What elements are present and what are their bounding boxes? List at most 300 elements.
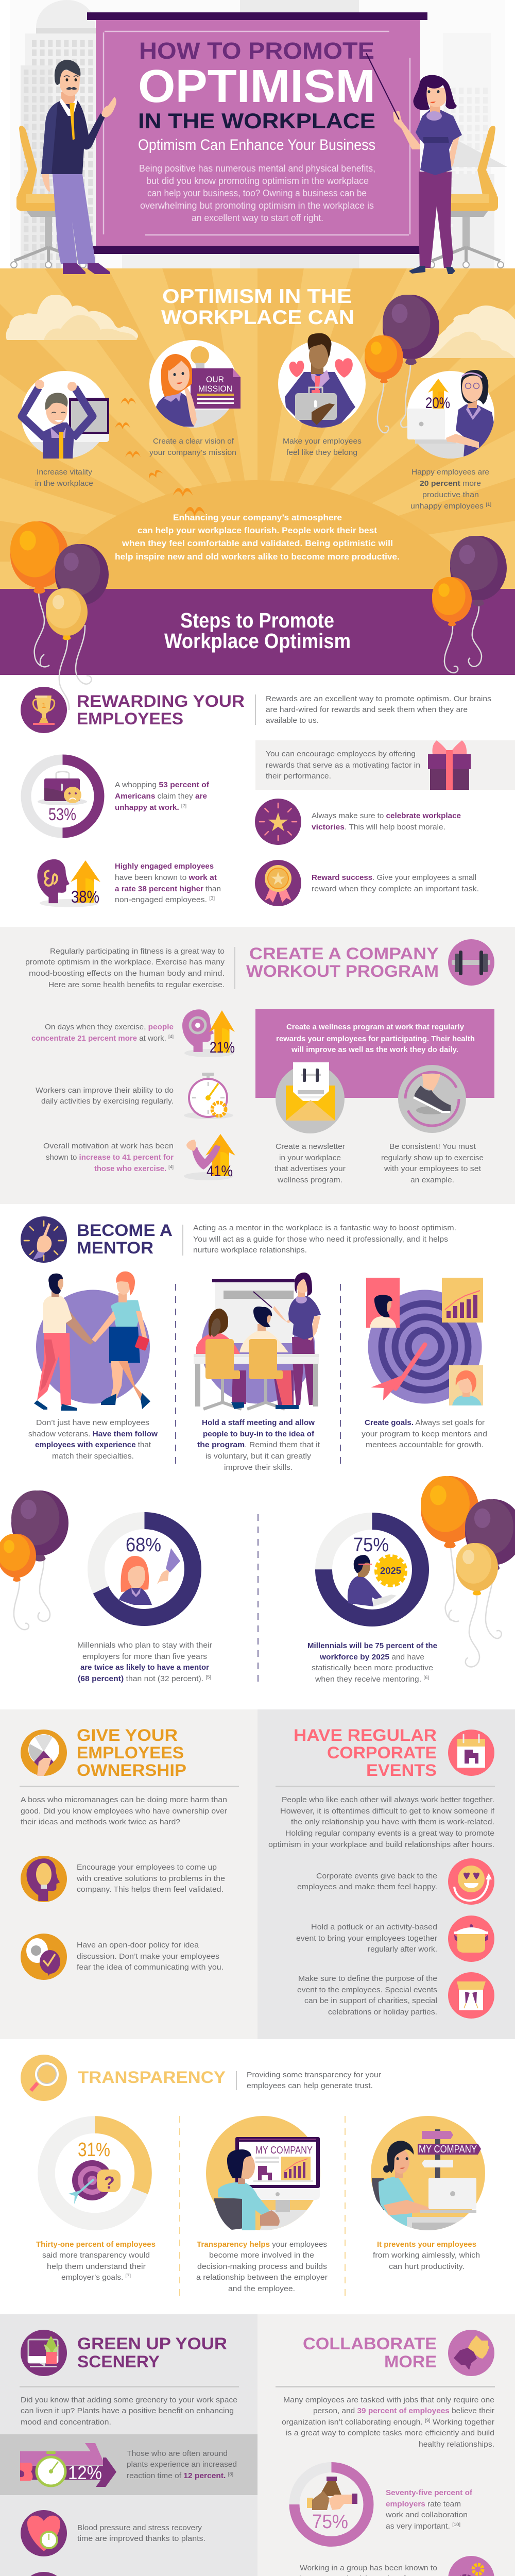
icon: running shoe bbox=[398, 1065, 466, 1133]
captions under circle illustrations: productive than bbox=[422, 490, 479, 499]
captions: in your workplace bbox=[279, 1154, 341, 1162]
stat text: 38 percent: non-engaged employees. bbox=[115, 895, 202, 904]
intro text: nurture workplace relationships. bbox=[193, 1246, 307, 1255]
captions under circle illustrations bbox=[35, 437, 491, 511]
stat text: 38 percent: Highly engaged employees bbox=[115, 862, 214, 871]
illustration: productive employee bbox=[407, 370, 495, 459]
intro text bbox=[21, 2396, 237, 2427]
stat text: 38 percent: have been known to work at bbox=[115, 873, 217, 882]
balloons top right bbox=[365, 295, 439, 433]
heading: REWARDING YOUR bbox=[77, 692, 245, 710]
icon: gears and arrow bbox=[448, 2556, 494, 2576]
balloons right of steps band bbox=[432, 536, 507, 673]
band: reaction time stat: [8] bbox=[228, 2471, 233, 2477]
illustration: shadowing bbox=[34, 1272, 150, 1411]
title: OPTIMISM bbox=[138, 61, 375, 112]
tip text: define the purpose: event to the employees. Special events bbox=[297, 1986, 437, 1994]
intro text: Here are some health benefits to regular exercise. bbox=[48, 980, 225, 989]
presentation screen bbox=[87, 12, 427, 254]
heading bbox=[77, 1221, 173, 1257]
captions: employees with experience that bbox=[35, 1440, 151, 1449]
our mission sign text: MISSION bbox=[198, 384, 232, 394]
heading: SCENERY bbox=[77, 2352, 160, 2371]
heading: GREEN UP YOUR bbox=[77, 2334, 227, 2353]
cloud left bbox=[6, 295, 138, 340]
illustration: company dashboard bbox=[206, 2116, 320, 2236]
icon: star bbox=[255, 799, 301, 845]
hero background: city skyline bbox=[0, 0, 515, 268]
stat text: 68 percent: are twice as likely to have a mentor bbox=[80, 1663, 209, 1672]
intro text: Many employees are tasked with jobs that only require one bbox=[283, 2396, 494, 2404]
purple band background bbox=[0, 589, 515, 675]
title: IN THE WORKPLACE bbox=[138, 109, 375, 133]
icon: medal bbox=[255, 860, 301, 906]
tip text: creative solutions: Encourage your employees to come up bbox=[77, 1863, 217, 1872]
tip text: productivity: Working in a group has been known to bbox=[300, 2564, 437, 2572]
tip text: potluck bbox=[296, 1923, 437, 1954]
heading: OWNERSHIP bbox=[77, 1761, 186, 1780]
intro paragraph: can help your business, too? Owning a business can be bbox=[147, 188, 367, 198]
heading bbox=[246, 944, 439, 980]
donut: 68 percent bbox=[96, 1521, 193, 1618]
intro paragraph: overwhelming but promoting optimism in the workplace is bbox=[140, 200, 374, 211]
icon: cooking pot bbox=[448, 1916, 494, 1962]
captions under circle illustrations: Make your employees bbox=[283, 437, 362, 446]
our mission sign text: OUR bbox=[206, 375, 224, 384]
captions: Create goals. Always set goals for bbox=[365, 1418, 485, 1427]
tip text: open-door policy: Have an open-door policy for idea bbox=[77, 1941, 199, 1950]
tip: celebrate victories bbox=[312, 811, 461, 832]
captions: that advertises your bbox=[274, 1164, 346, 1173]
captions: It prevents your employees bbox=[377, 2240, 476, 2249]
icon: calendar bbox=[448, 1730, 494, 1776]
heading: EMPLOYEES bbox=[77, 709, 183, 728]
captions: help them understand their bbox=[47, 2262, 146, 2271]
stat text: 21 percent bbox=[31, 1023, 174, 1043]
captions under circle illustrations: your company’s mission bbox=[149, 448, 236, 457]
intro text: their ideas and methods work twice as hard? bbox=[21, 1818, 180, 1826]
heading: EMPLOYEES bbox=[77, 1743, 184, 1762]
captions: decision-making process and builds bbox=[197, 2262, 327, 2271]
panel: rewarding your employees bbox=[21, 687, 515, 907]
captions: from working aimlessly, which bbox=[373, 2251, 480, 2260]
table and chairs bbox=[194, 1339, 319, 1409]
stat text: 21 percent: [4] bbox=[168, 1034, 174, 1039]
stat icon: 21 percent concentration bbox=[182, 1009, 235, 1057]
wellness program callout: Create a wellness program at work that regularly bbox=[286, 1023, 465, 1031]
steps heading bbox=[164, 608, 351, 653]
intro text: Acting as a mentor in the workplace is a fantastic way to boost optimism. bbox=[193, 1224, 456, 1232]
panel: become a mentor bbox=[0, 1216, 515, 1684]
stat text: team work: Seventy-five percent of bbox=[386, 2488, 473, 2497]
heading: TRANSPARENCY bbox=[78, 2068, 226, 2087]
tip text: blood pressure: Blood pressure and stress recovery bbox=[77, 2523, 202, 2532]
illustration: target with goals bbox=[366, 1278, 483, 1405]
heading: GIVE YOUR bbox=[77, 1726, 178, 1744]
20 percent figure: 20% bbox=[425, 395, 450, 412]
closing statement of yellow section: Enhancing your company’s atmosphere bbox=[173, 513, 342, 522]
tip: reward success bbox=[312, 873, 479, 893]
photo: mentor bbox=[366, 1278, 400, 1328]
captions: and the employee. bbox=[228, 2284, 295, 2293]
icon: champagne card bbox=[448, 1972, 494, 2019]
captions under circle illustrations: Create a clear vision of bbox=[153, 437, 234, 446]
stat text: team work: work and collaboration bbox=[385, 2511, 468, 2519]
icon: idea head bbox=[21, 1856, 67, 1902]
balloons right bbox=[421, 1476, 515, 1667]
icon: 38 percent head and arrow bbox=[37, 859, 100, 907]
stat text: team work: as very important. bbox=[386, 2522, 447, 2531]
intro text: can liven it up? Plants have a positive benefit on enhancing bbox=[21, 2406, 234, 2415]
icon: newsletter envelope bbox=[276, 1062, 345, 1133]
section heading: optimism in the workplace can: WORKPLACE CAN bbox=[161, 307, 354, 329]
donut: 68 percent: 68% bbox=[126, 1534, 161, 1556]
captions: an example. bbox=[410, 1176, 454, 1184]
intro text: Regularly participating in fitness is a great way to bbox=[50, 947, 225, 956]
stat text: team work: [10] bbox=[452, 2522, 460, 2527]
heading: EVENTS bbox=[366, 1761, 437, 1780]
intro text: Holding regular company events is a great way to promote bbox=[285, 1829, 494, 1838]
stat icon: 21 percent concentration: 21% bbox=[210, 1039, 235, 1056]
stat text: 53 percent bbox=[115, 781, 210, 812]
stat text: daily activities: daily activities by exercising regularly. bbox=[41, 1097, 174, 1106]
intro text bbox=[268, 1795, 495, 1849]
captions under circle illustrations: 20 percent more bbox=[420, 479, 481, 488]
icon: stopwatch with gear bbox=[184, 1073, 233, 1119]
presenter: man bbox=[41, 60, 116, 274]
yellow section background with sun rays bbox=[0, 268, 515, 589]
captions bbox=[28, 1418, 487, 1472]
captions: said more transparency would bbox=[42, 2251, 150, 2260]
man bbox=[34, 1274, 94, 1411]
stat text: 41 percent: [4] bbox=[168, 1164, 174, 1170]
icon: trophy bbox=[21, 687, 67, 733]
captions: regularly show up to exercise bbox=[381, 1154, 484, 1162]
closing statement of yellow section: help inspire new and old workers alike to become more productive. bbox=[115, 552, 400, 562]
donut: 75 percent: 2025 bbox=[380, 1566, 401, 1576]
closing statement of yellow section: when they feel comfortable and validated. Being optimistic will bbox=[122, 538, 393, 548]
gift callout: rewards that serve as a motivating factor in bbox=[266, 761, 420, 770]
intro text bbox=[193, 1224, 456, 1255]
teacher bbox=[273, 1273, 321, 1405]
captions: [7] bbox=[126, 2273, 131, 2278]
intro paragraph: Being positive has numerous mental and physical benefits, bbox=[139, 163, 375, 174]
gift callout: their performance. bbox=[266, 772, 331, 781]
woman bbox=[92, 1272, 150, 1409]
seated woman bbox=[196, 1309, 240, 1354]
chart card bbox=[442, 1278, 483, 1323]
stat text: daily activities: Workers can improve their ability to do bbox=[36, 1086, 174, 1095]
tip text: give back: Corporate events give back to the bbox=[316, 1872, 437, 1880]
stat text: daily activities bbox=[36, 1086, 174, 1106]
gift callout bbox=[255, 740, 515, 790]
icon: puzzle bbox=[448, 2330, 494, 2376]
stat text: 75 percent: [6] bbox=[423, 1675, 429, 1680]
band: reaction time stat: 12% bbox=[68, 2462, 102, 2483]
donut: 75 percent team work: 75% bbox=[312, 2511, 348, 2533]
captions: wellness program. bbox=[277, 1176, 342, 1184]
heading: WORKOUT PROGRAM bbox=[246, 962, 439, 980]
screen label: MY COMPANY bbox=[255, 2145, 313, 2156]
closing statement of yellow section bbox=[115, 513, 400, 562]
our mission sign text bbox=[198, 375, 232, 394]
section heading: optimism in the workplace can: OPTIMISM IN THE bbox=[162, 285, 352, 308]
tip text: open-door policy: discussion. Don’t make your employees bbox=[77, 1952, 219, 1961]
donut: 53 percent bbox=[26, 759, 99, 833]
intro text: Did you know that adding some greenery to your work space bbox=[21, 2396, 237, 2404]
captions: Don’t just have new employees bbox=[36, 1418, 149, 1427]
illustration: employee cheering bbox=[21, 371, 109, 459]
captions: people to buy-in to the idea of bbox=[203, 1430, 315, 1438]
band: reaction time stat bbox=[0, 2434, 258, 2495]
icon: dumbbell bbox=[448, 939, 494, 986]
illustration: employee with hearts bbox=[278, 333, 366, 428]
illustration: our mission bbox=[149, 340, 241, 428]
stat text: team work bbox=[385, 2488, 473, 2531]
captions: Thirty-one percent of employees bbox=[36, 2240, 156, 2249]
intro text: People who like each other will always work better together. bbox=[282, 1795, 494, 1804]
intro paragraph bbox=[139, 163, 375, 223]
donut: 31 percent: ? bbox=[104, 2173, 115, 2193]
tip text: potluck: Hold a potluck or an activity-based bbox=[311, 1923, 437, 1931]
stat text: 41 percent: shown to increase to 41 percent for bbox=[46, 1153, 174, 1162]
intro paragraph: an excellent way to start off right. bbox=[192, 213, 323, 223]
icon: 41 percent motivation arm bbox=[184, 1134, 235, 1180]
stat text: 38 percent: a rate 38 percent higher than bbox=[115, 885, 221, 893]
stat text: 68 percent: (68 percent) than not (32 percent). bbox=[78, 1674, 200, 1683]
stat text: 68 percent: [5] bbox=[205, 1674, 211, 1680]
icon: 38 percent head and arrow: 38% bbox=[71, 887, 99, 906]
heading: CREATE A COMPANY bbox=[249, 944, 439, 963]
wellness program callout: rewards your employees for participating. Their health bbox=[276, 1035, 475, 1043]
heading: BECOME A bbox=[77, 1221, 173, 1240]
stat text: 68 percent: employers for more than five years bbox=[82, 1652, 207, 1661]
steps heading: Workplace Optimism bbox=[164, 629, 351, 653]
stat text: team work: employers rate team bbox=[386, 2500, 461, 2509]
wellness program callout bbox=[255, 1009, 494, 1098]
captions: shadow veterans. Have them follow bbox=[28, 1430, 158, 1438]
captions: a relationship between the employer bbox=[196, 2273, 328, 2282]
tip text: give back: employees and make them feel happy. bbox=[297, 1883, 437, 1891]
intro text: Providing some transparency for your bbox=[247, 2071, 381, 2079]
tip text: blood pressure: time are improved thanks to plants. bbox=[77, 2534, 205, 2543]
band: reaction time stat: plants experience an increased bbox=[127, 2460, 237, 2469]
captions under circle illustrations: Happy employees are bbox=[411, 468, 489, 477]
captions under circle illustrations: in the workplace bbox=[35, 479, 93, 488]
stat text: 21 percent: concentrate 21 percent more at work. bbox=[31, 1034, 166, 1043]
tip text: open-door policy: fear the idea of communicating with you. bbox=[77, 1963, 224, 1972]
icon: heart stopwatch bbox=[21, 2510, 67, 2556]
tip text: define the purpose: can be in support of charities, special bbox=[304, 1996, 437, 2005]
donut: 75 percent team work bbox=[295, 2467, 369, 2541]
heading bbox=[77, 692, 245, 728]
stat text: 53 percent: Americans claim they are bbox=[115, 792, 207, 801]
balloons left bbox=[0, 1490, 68, 1630]
sign label: MY COMPANY bbox=[419, 2144, 477, 2155]
cloud right bbox=[421, 306, 515, 358]
illustration: signpost bbox=[371, 2116, 485, 2230]
balloons left of steps band bbox=[10, 521, 109, 710]
heading bbox=[294, 1726, 437, 1780]
captions under circle illustrations: unhappy employees bbox=[410, 502, 479, 511]
tip text: creative solutions: company. This helps them feel validated. bbox=[77, 1885, 224, 1894]
stat text: 53 percent: A whopping 53 percent of bbox=[115, 781, 210, 789]
tip text: potluck: event to bring your employees together bbox=[296, 1934, 437, 1943]
tip text: open-door policy bbox=[77, 1941, 224, 1972]
intro text: You will act as a guide for those who need it professionally, and it helps bbox=[193, 1235, 448, 1244]
panel: have regular corporate events bbox=[258, 1709, 515, 2039]
intro text: are hard-wired for rewards and seek them when they are bbox=[266, 705, 468, 714]
heading: COLLABORATE bbox=[303, 2334, 437, 2353]
panel: green up your scenery bbox=[0, 2314, 258, 2576]
intro text: optimism in your workplace and build relationships after hours. bbox=[268, 1840, 494, 1849]
captions under circle illustrations: Increase vitality bbox=[37, 468, 93, 477]
stat text: 41 percent bbox=[43, 1142, 174, 1173]
captions: your program to keep mentors and bbox=[362, 1430, 487, 1438]
tip text: define the purpose: Make sure to define the purpose of the bbox=[298, 1974, 437, 1983]
icon: pointing hand bbox=[21, 1216, 67, 1263]
stat text: 21 percent: On days when they exercise, people bbox=[45, 1023, 174, 1031]
seated man bbox=[239, 1307, 288, 1352]
intro text bbox=[266, 694, 491, 725]
intro text bbox=[282, 2396, 494, 2449]
decorative birds bbox=[115, 398, 205, 516]
stat text: 68 percent: Millennials who plan to stay with their bbox=[77, 1641, 212, 1650]
icon: happy face bbox=[448, 1858, 494, 1905]
tip text: potluck: regularly after work. bbox=[368, 1945, 437, 1954]
hero chairs bbox=[11, 126, 504, 268]
intro text: the only relationship you have with them is work-related. bbox=[291, 1818, 494, 1826]
captions: can hurt productivity. bbox=[389, 2262, 465, 2271]
stat text: 53 percent: [2] bbox=[181, 803, 186, 808]
intro text: available to us. bbox=[266, 716, 319, 725]
intro text bbox=[21, 1795, 227, 1826]
title: HOW TO PROMOTE bbox=[139, 38, 374, 64]
band: reaction time stat: Those who are often around bbox=[127, 2449, 228, 2458]
band: reaction time stat: reaction time of 12 percent. bbox=[127, 2471, 225, 2480]
intro text: is a great way to complete tasks more efficiently and build bbox=[286, 2429, 494, 2437]
captions: match their specialties. bbox=[52, 1452, 134, 1461]
captions: become more involved in the bbox=[209, 2251, 314, 2260]
stat text: 75 percent: when they receive mentoring. bbox=[315, 1675, 416, 1684]
stat text: 75 percent: Millennials will be 75 percent of the bbox=[307, 1641, 437, 1650]
heading: MORE bbox=[384, 2352, 437, 2371]
tip text: define the purpose: celebrations or holiday parties. bbox=[328, 2008, 437, 2016]
donut: 75 percent: 75% bbox=[353, 1534, 389, 1556]
subtitle: Optimism Can Enhance Your Business bbox=[138, 137, 375, 154]
icon: speech bubbles bbox=[21, 1934, 67, 1980]
stat text: 38 percent bbox=[115, 862, 221, 904]
captions under circle illustrations: feel like they belong bbox=[286, 448, 357, 457]
tip: celebrate victories: Always make sure to celebrate workplace bbox=[312, 811, 461, 820]
captions under circle illustrations: [1] bbox=[486, 502, 491, 507]
closing statement of yellow section: can help your workplace flourish. People work their best bbox=[138, 526, 377, 535]
intro text: mood and concentration. bbox=[21, 2418, 111, 2427]
stat text: 41 percent: those who exercise. bbox=[94, 1164, 166, 1173]
tip text: define the purpose bbox=[297, 1974, 437, 2016]
stat text: 75 percent bbox=[307, 1641, 437, 1684]
donut: 53 percent: 53% bbox=[48, 805, 76, 824]
tip: celebrate victories: victories. This will help boost morale. bbox=[312, 823, 445, 832]
heading bbox=[77, 1726, 186, 1780]
gift callout: You can encourage employees by offering bbox=[266, 750, 416, 758]
wellness program callout: will improve as well as the work they do daily. bbox=[291, 1045, 458, 1054]
captions bbox=[36, 2240, 480, 2293]
captions bbox=[274, 1142, 484, 1184]
tip: reward success: reward when they complete an important task. bbox=[312, 885, 479, 893]
intro text: good. Did you know employees who have ownership over bbox=[21, 1807, 227, 1816]
icon: magnifying glass bbox=[21, 2055, 67, 2101]
panel: collaborate more bbox=[258, 2314, 515, 2576]
icon: ownership pie bbox=[21, 1730, 67, 1776]
icon: 41 percent motivation arm: 41% bbox=[207, 1163, 233, 1180]
stat text: 38 percent: [3] bbox=[209, 895, 215, 901]
intro text: organization isn’t collaborating enough. bbox=[282, 2418, 416, 2427]
stat text: 53 percent: unhappy at work. bbox=[115, 803, 179, 812]
captions: Transparency helps your employees bbox=[197, 2240, 327, 2249]
tip text: productivity bbox=[299, 2564, 437, 2576]
tip text: blood pressure bbox=[77, 2523, 205, 2543]
icon: trophy: 1 bbox=[42, 701, 46, 710]
title bbox=[138, 38, 375, 133]
stat text: 68 percent bbox=[77, 1641, 212, 1683]
stat text: 75 percent: statistically been more productive bbox=[312, 1664, 433, 1672]
tip text: creative solutions bbox=[76, 1863, 225, 1894]
panel: create a company workout program bbox=[0, 927, 515, 1204]
captions: the program . Remind them that it bbox=[197, 1440, 320, 1449]
intro text: A boss who micromanages can be doing more harm than bbox=[21, 1795, 227, 1804]
intro text: [9] bbox=[425, 2418, 431, 2423]
panel: transparency bbox=[21, 2055, 485, 2299]
icon: leaf and air bbox=[21, 2572, 67, 2576]
intro text: person, and 39 percent of employees believe their bbox=[313, 2406, 494, 2415]
icon: desk plant bbox=[21, 2330, 67, 2376]
captions: Be consistent! You must bbox=[389, 1142, 476, 1151]
presenter: woman with pointer bbox=[366, 53, 462, 274]
steps heading: Steps to Promote bbox=[180, 608, 334, 632]
heading: HAVE REGULAR bbox=[294, 1726, 437, 1744]
intro text: promote optimism in the workplace. Exercise has many bbox=[25, 958, 225, 967]
intro text bbox=[25, 947, 225, 989]
intro text: Rewards are an excellent way to promote optimism. Our brains bbox=[266, 694, 491, 703]
illustration: staff meeting bbox=[194, 1273, 321, 1409]
tip: reward success: Reward success. Give your employees a small bbox=[312, 873, 476, 882]
intro text: However, it is oftentimes difficult to get to know someone if bbox=[280, 1807, 495, 1816]
photo: mentee bbox=[449, 1365, 483, 1405]
intro text: Working together bbox=[431, 2418, 494, 2427]
panel: give your employees ownership bbox=[0, 1709, 258, 2039]
tip text: creative solutions: with creative solutions to problems in the bbox=[76, 1874, 225, 1883]
captions: improve their skills. bbox=[224, 1463, 293, 1472]
heading: CORPORATE bbox=[327, 1743, 437, 1762]
section heading: optimism in the workplace can bbox=[161, 285, 354, 329]
heading: MENTOR bbox=[77, 1239, 153, 1257]
intro paragraph: but did you know promoting optimism in the workplace bbox=[146, 176, 369, 186]
intro text: employees can help generate trust. bbox=[247, 2081, 373, 2090]
heading bbox=[77, 2334, 227, 2371]
seated man bbox=[214, 2149, 280, 2230]
stat text: 75 percent: workforce by 2025 and have bbox=[319, 1653, 424, 1662]
captions: employer’s goals. bbox=[61, 2273, 122, 2282]
donut: 31 percent bbox=[46, 2125, 143, 2222]
heading bbox=[303, 2334, 437, 2371]
intro text: mood-boosting effects on the human body and mind. bbox=[29, 969, 225, 978]
tip text: give back bbox=[297, 1872, 437, 1891]
intro text bbox=[247, 2071, 381, 2090]
captions: Hold a staff meeting and allow bbox=[202, 1418, 315, 1427]
captions: is voluntary, but it can greatly bbox=[205, 1452, 312, 1461]
stat text: 41 percent: Overall motivation at work has been bbox=[43, 1142, 174, 1150]
